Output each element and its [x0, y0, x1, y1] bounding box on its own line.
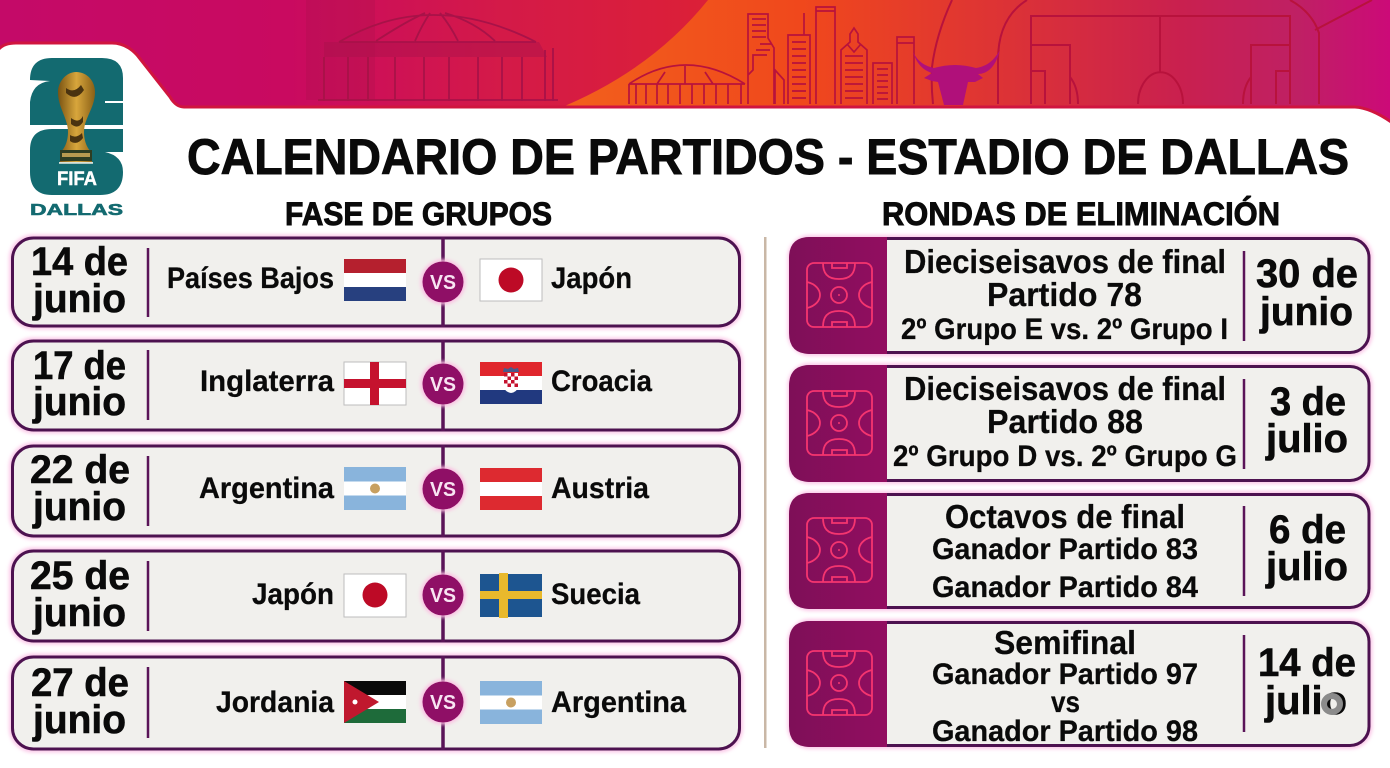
match text: Partido 78	[987, 276, 1142, 313]
team: Argentina: Argentina	[551, 686, 686, 719]
knockout card: Octavos de final	[789, 493, 1369, 609]
vs badge: VS	[430, 479, 456, 501]
match text: Partido 88	[987, 403, 1143, 440]
date	[30, 554, 130, 635]
date: 14 de	[1258, 641, 1356, 685]
match text: Ganador Partido 83	[932, 533, 1198, 566]
date: junio	[32, 698, 126, 742]
match text	[932, 624, 1198, 748]
date: julio	[1264, 679, 1347, 723]
vs badge	[420, 680, 466, 724]
date: junio	[32, 380, 126, 424]
match row: 17 de junio, Inglaterra vs Croacia	[12, 340, 740, 431]
match text: Semifinal	[994, 624, 1136, 661]
date	[1265, 508, 1348, 589]
match text	[893, 370, 1237, 473]
date: junio	[1259, 290, 1353, 334]
date	[31, 240, 128, 321]
match row: 22 de junio, Argentina vs Austria	[12, 445, 740, 537]
match text	[932, 498, 1198, 604]
date	[30, 448, 130, 529]
flag: England	[344, 362, 406, 405]
illustration: small dome	[629, 65, 745, 104]
heading: knockout rounds: RONDAS DE ELIMINACIÓN	[882, 196, 1280, 232]
vs badge	[420, 260, 466, 304]
illustration: longhorn bull head	[913, 50, 1000, 105]
column divider	[764, 237, 766, 748]
flag: Netherlands	[344, 259, 406, 301]
team: Jordania: Jordania	[216, 686, 334, 719]
team: Japón: Japón	[551, 262, 632, 295]
date: junio	[32, 485, 126, 529]
watermark	[1324, 696, 1340, 712]
numeral 2	[30, 58, 123, 125]
FIFA wordmark: FIFA	[57, 169, 97, 190]
date	[31, 661, 129, 742]
date	[32, 344, 126, 424]
match row: 25 de junio, Japón vs Suecia	[12, 550, 740, 642]
date: 27 de	[31, 661, 129, 705]
numeral 6	[30, 129, 123, 195]
vs badge	[420, 572, 466, 618]
date: julio	[1265, 417, 1348, 461]
vs badge	[420, 466, 466, 512]
date	[1258, 641, 1356, 723]
icon: pitch	[807, 651, 872, 715]
date: 22 de	[30, 448, 130, 492]
flag: Japan	[480, 259, 542, 301]
date: 25 de	[30, 554, 130, 598]
flag: Austria	[480, 468, 542, 510]
trophy	[58, 72, 95, 162]
heading: group stage: FASE DE GRUPOS	[285, 196, 552, 232]
date: junio	[32, 277, 126, 321]
match text: Ganador Partido 97	[932, 658, 1198, 691]
vs badge: VS	[430, 374, 456, 396]
match text: Dieciseisavos de final	[904, 243, 1226, 280]
flag: Croatia	[480, 362, 542, 404]
team: Países Bajos: Países Bajos	[167, 262, 334, 295]
vs badge: VS	[430, 692, 456, 714]
vs badge	[420, 362, 466, 406]
date	[1265, 380, 1348, 461]
match text: Ganador Partido 98	[932, 715, 1198, 748]
match text: 2º Grupo D vs. 2º Grupo G	[893, 440, 1237, 473]
team: Argentina: Argentina	[199, 472, 334, 505]
date: 3 de	[1270, 380, 1346, 424]
match text: Dieciseisavos de final	[904, 370, 1226, 407]
flag: Jordan	[344, 681, 406, 723]
icon: pitch	[807, 391, 872, 455]
date: 30 de	[1256, 252, 1358, 296]
header banner with Dallas illustrations	[0, 0, 1390, 130]
icon: pitch	[807, 263, 872, 327]
team: Croacia: Croacia	[551, 365, 652, 398]
vs badge: VS	[430, 272, 456, 294]
date	[1256, 252, 1358, 334]
illustration: dome stadium	[306, 0, 558, 101]
match row: 14 de junio, Países Bajos vs Japón	[12, 237, 740, 327]
team: Suecia: Suecia	[551, 578, 640, 611]
date: julio	[1265, 545, 1348, 589]
match text	[901, 243, 1228, 346]
DALLAS wordmark: DALLAS	[30, 202, 123, 219]
date: 6 de	[1269, 508, 1346, 552]
match text: 2º Grupo E vs. 2º Grupo I	[901, 313, 1228, 346]
illustration: stadium football pitch outline	[932, 0, 1372, 104]
date: 17 de	[33, 344, 126, 388]
match text: Ganador Partido 84	[932, 571, 1198, 604]
illustration: Dallas skyline	[748, 7, 914, 104]
match text: vs	[1051, 686, 1080, 719]
match row: 27 de junio, Jordania vs Argentina	[12, 656, 740, 750]
match text: Octavos de final	[945, 498, 1185, 535]
logo: FIFA 2026 Dallas	[30, 58, 123, 219]
team: Austria: Austria	[551, 472, 649, 505]
date: junio	[32, 591, 126, 635]
knockout card: Partido 78	[789, 237, 1369, 354]
flag: Argentina	[480, 681, 542, 724]
date: 14 de	[31, 240, 128, 284]
vs badge: VS	[430, 585, 456, 607]
flag: Argentina	[344, 467, 406, 510]
flag: Japan	[344, 574, 406, 617]
knockout card: Partido 88	[789, 365, 1369, 482]
team: Japón: Japón	[252, 578, 334, 611]
flag: Sweden	[480, 573, 542, 618]
team: Inglaterra: Inglaterra	[200, 365, 334, 398]
icon: pitch	[807, 518, 872, 582]
knockout card: Semifinal	[789, 621, 1369, 748]
